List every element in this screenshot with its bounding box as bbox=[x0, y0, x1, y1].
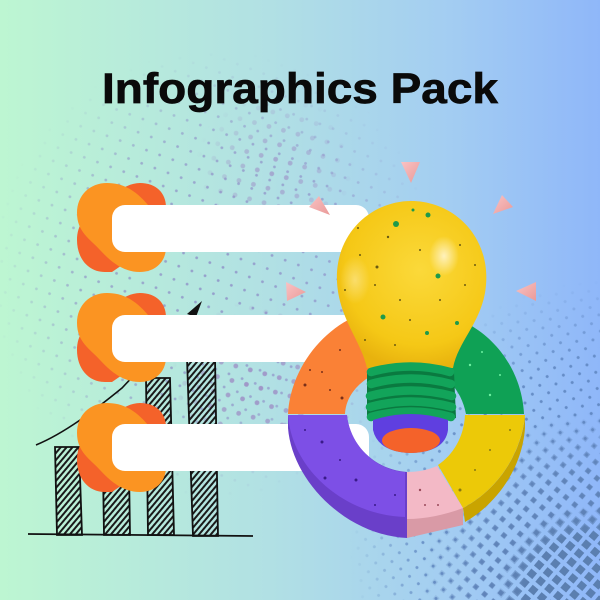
cone top bbox=[401, 162, 420, 183]
icon: orange blob bbox=[77, 293, 166, 382]
segment: green bbox=[440, 325, 524, 414]
donut chart bbox=[288, 320, 525, 538]
trend arrow head bbox=[187, 301, 202, 317]
halftone dots: centre bbox=[2, 64, 402, 485]
halftone dots: bottom right corner bbox=[360, 298, 600, 600]
light bulb bbox=[337, 201, 486, 453]
baseline bbox=[28, 534, 253, 536]
list row 3 bbox=[77, 403, 369, 492]
icon: orange blob bbox=[77, 183, 166, 272]
bulb speckles bbox=[380, 208, 459, 335]
bar 1 bbox=[55, 447, 82, 535]
bar 3 bbox=[146, 378, 174, 535]
cone upper right bbox=[493, 195, 513, 214]
white label bar bbox=[112, 424, 369, 471]
icon: orange blob bbox=[77, 403, 166, 492]
white label bar bbox=[112, 315, 369, 362]
cone upper left bbox=[309, 196, 330, 215]
white label bar bbox=[112, 205, 369, 252]
segment: yellow bbox=[438, 415, 525, 522]
orange tip bbox=[382, 428, 440, 453]
cone mid right bbox=[516, 282, 536, 301]
cone mid left bbox=[286, 282, 306, 301]
segment: purple bbox=[288, 415, 407, 538]
speckles bbox=[304, 349, 344, 400]
purple collar bbox=[373, 414, 448, 453]
title: Infographics Pack bbox=[102, 65, 498, 113]
bulb glass bbox=[337, 201, 486, 368]
trend line bbox=[36, 316, 190, 445]
highlights bbox=[340, 256, 370, 304]
list row 1 bbox=[77, 183, 369, 272]
bar 2 bbox=[103, 470, 130, 535]
list row 2 bbox=[77, 293, 369, 382]
segment: orange bbox=[288, 320, 378, 414]
pink cones bbox=[286, 162, 536, 301]
hand-drawn bar chart bbox=[28, 301, 253, 536]
green screw base bbox=[367, 364, 456, 425]
bar 4 bbox=[187, 358, 218, 536]
segment: pink bbox=[407, 466, 463, 538]
